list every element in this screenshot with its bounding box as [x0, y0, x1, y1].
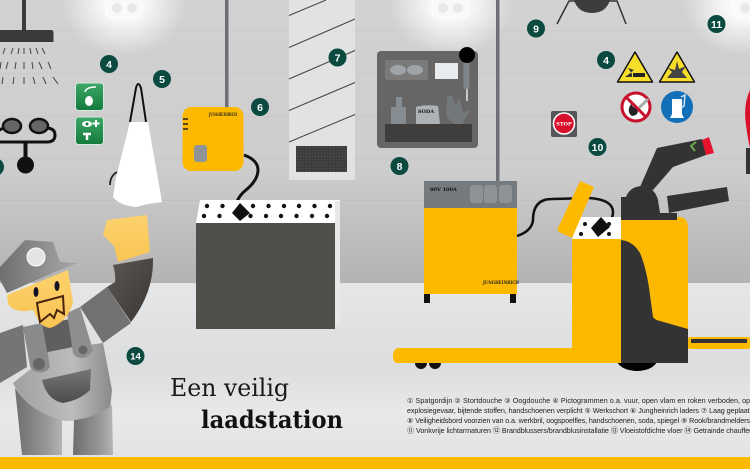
left leg: [15, 388, 62, 455]
wall: [0, 0, 750, 283]
legend: [407, 396, 750, 435]
forklift truck: [393, 137, 750, 371]
marker 7: [328, 48, 346, 66]
marker 7: 7: [335, 52, 341, 64]
marker 6: 6: [257, 102, 263, 114]
legend: ⑪ Vonkvrije lichtarmaturen ⑫ Brandblussers/brandblusinstallatie ⑬ Vloeistofdichte vloer ⑭ Getrainde chauffeurs: [407, 426, 750, 435]
panel: ventilation shaft: [289, 0, 355, 180]
marker 5: [153, 70, 171, 88]
charger: 80V 100A: JUNGHEINRICH: [482, 280, 519, 286]
marker 6: [251, 98, 269, 116]
raised arm: [80, 287, 131, 343]
icon: wall charger: JUNGHEINRICH: [208, 112, 237, 118]
marker 11: [708, 15, 726, 33]
marker 10: 10: [592, 142, 603, 154]
torso: [40, 318, 82, 356]
marker 14: 14: [130, 352, 141, 362]
icon: prohibition and glove signs: [622, 91, 693, 123]
title: Een veilig: [170, 374, 289, 402]
icon: wall charger: [182, 0, 244, 171]
icon: extinguisher: [745, 90, 750, 174]
icon: warning triangles: [618, 52, 694, 82]
marker 3: [0, 158, 4, 176]
icon: stop button: [551, 111, 577, 137]
icon: eye shower: [0, 119, 55, 174]
marker 4: [100, 55, 118, 73]
legend: explosiegevaar, bijtende stoffen, handschoenen verplicht ⑤ Werkschort ⑥ Jungheinrich laders ⑦ Laag geplaatste: [407, 406, 750, 415]
marker 4 right: 4: [603, 55, 609, 67]
left arm: [0, 325, 27, 383]
pocket: [42, 369, 91, 403]
marker 14: [126, 347, 144, 365]
overalls: [13, 343, 112, 421]
character: worker: [0, 215, 153, 455]
title: [170, 374, 343, 434]
marker 5: 5: [159, 74, 165, 86]
floor: [0, 283, 750, 457]
charger: 80V 100A: 80V 100A: [430, 187, 457, 193]
helmet: [0, 240, 78, 293]
panel: safety board: SODA: [418, 109, 434, 115]
eyes: [34, 281, 60, 297]
bottom bar: [0, 457, 750, 469]
icon: shower: [0, 0, 58, 84]
marker 9: 9: [533, 24, 539, 36]
forearm: [107, 258, 153, 322]
legend: ⑧ Veiligheidsbord voorzien van o.a. werkbril, oogspoelfles, handschoenen, soda, spiegel ⑨ Rook/brandmelders: [407, 416, 750, 425]
straps: [23, 323, 50, 372]
title: laadstation: [201, 405, 343, 434]
right leg: [73, 405, 113, 455]
marker 4: 4: [106, 59, 112, 71]
icon: cable and battery: [196, 155, 340, 329]
panel: safety board: [377, 47, 478, 148]
marker 4 right: [597, 51, 615, 69]
icon: apron: [110, 84, 162, 207]
fist: [103, 215, 150, 262]
marker 8: 8: [397, 161, 403, 173]
icon: green safety signs: [76, 83, 104, 144]
marker 11: 11: [711, 19, 722, 31]
beard: [37, 296, 64, 322]
charger: 80V 100A: [424, 0, 519, 303]
icon: smoke detector: [557, 0, 626, 24]
icon: stop button: STOP: [556, 122, 572, 128]
marker 10: [588, 138, 606, 156]
head: [7, 270, 73, 328]
marker 9: [527, 20, 545, 38]
marker 8: [390, 157, 408, 175]
helmet lamp: [27, 248, 45, 266]
ceiling lights: [62, 0, 750, 55]
